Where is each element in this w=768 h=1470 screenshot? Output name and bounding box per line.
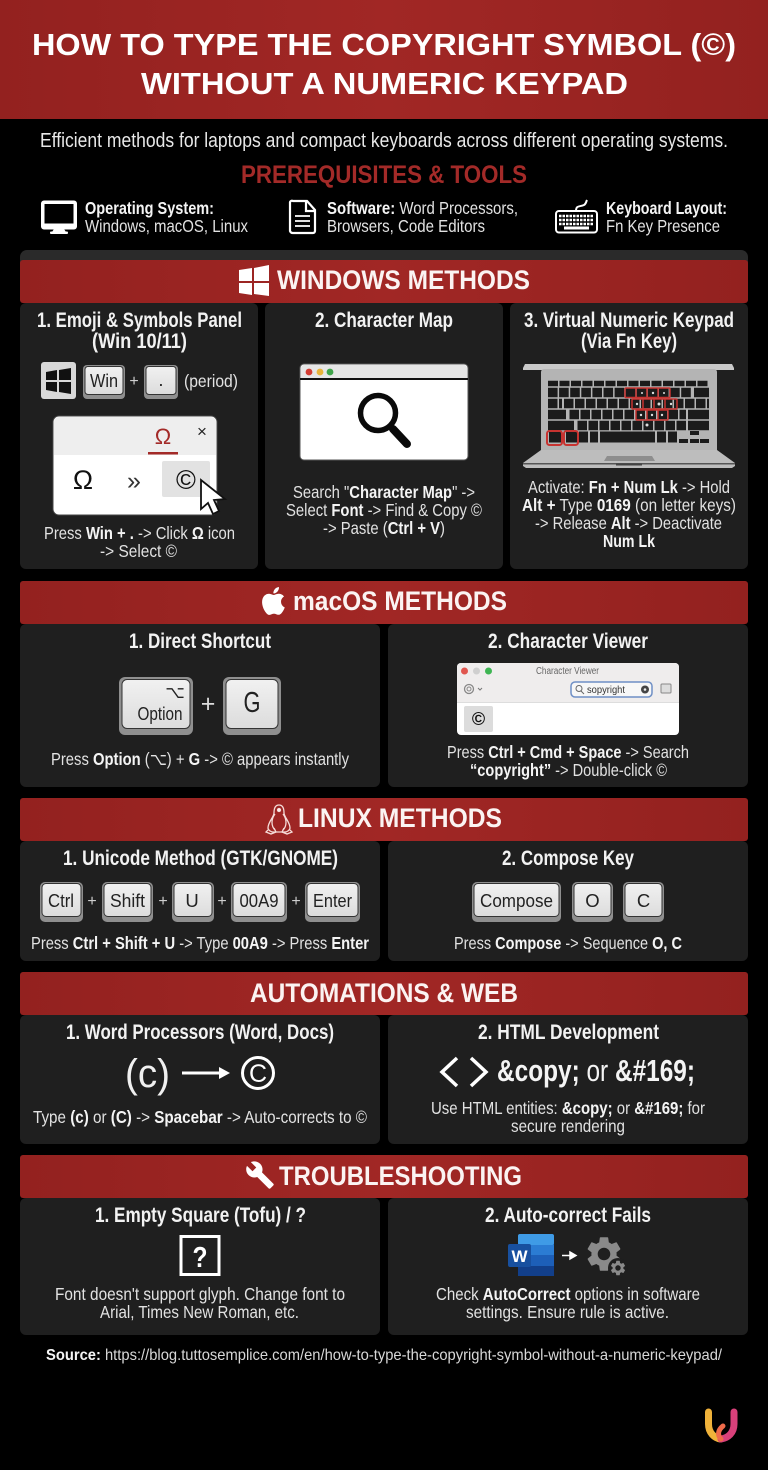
- title: HOW TO TYPE THE COPYRIGHT SYMBOL (©): [32, 28, 736, 62]
- arrow: [562, 1252, 576, 1259]
- card title: (Win 10/11): [92, 330, 187, 353]
- card title: [37, 309, 242, 353]
- icon: tofu square: ?: [192, 1242, 208, 1274]
- panel: windows methods: [20, 250, 748, 569]
- option plus g keys: +: [201, 690, 215, 718]
- icon: document: [290, 201, 315, 233]
- character viewer window: ©: [472, 709, 485, 729]
- shortcut keys: [41, 362, 238, 399]
- compose key sequence: Compose: [480, 890, 553, 911]
- automations header bar: [20, 972, 748, 1015]
- card: direct shortcut: [20, 624, 380, 787]
- windows header bar: [20, 260, 748, 303]
- compose key sequence: O: [585, 890, 600, 911]
- card: compose key: [388, 841, 748, 961]
- html entities illustration: &copy; or &#169;: [497, 1053, 695, 1088]
- card: unicode method: 1. Unicode Method (GTK/GNOME): [63, 847, 338, 870]
- card title: 1. Emoji & Symbols Panel: [37, 309, 242, 332]
- header banner: [0, 0, 768, 119]
- card text: Press Compose -> Sequence O, C: [454, 933, 682, 953]
- prerequisite: operating system: [41, 198, 248, 236]
- card text: -> Select ©: [100, 541, 177, 561]
- card text: Type (c) or (C) -> Spacebar -> Auto-corrects to ©: [33, 1107, 367, 1127]
- card: html development: [388, 1015, 748, 1144]
- autocorrect illustration: (c): [125, 1052, 170, 1096]
- icon: monitor: [41, 200, 77, 234]
- card: word processors: 1. Word Processors (Word, Docs): [66, 1021, 334, 1044]
- linux header bar: [20, 798, 748, 841]
- troubleshooting header bar: TROUBLESHOOTING: [279, 1161, 522, 1191]
- heading: prerequisites and tools: PREREQUISITES & TOOLS: [241, 161, 527, 189]
- emoji panel window: »: [127, 467, 141, 495]
- card: character viewer: 2. Character Viewer: [488, 630, 648, 653]
- card text: [436, 1284, 700, 1322]
- card: empty square: 1. Empty Square (Tofu) / ?: [95, 1204, 306, 1227]
- compose key sequence: C: [637, 890, 650, 911]
- card text: Press Ctrl + Cmd + Space -> Search: [447, 742, 689, 762]
- card text: Check AutoCorrect options in software: [436, 1284, 700, 1304]
- source line: Source: https://blog.tuttosemplice.com/en/how-to-type-the-copyright-symbol-without-a-numeric-keypad/: [46, 1347, 723, 1364]
- card: character viewer: [388, 624, 748, 787]
- panel: linux methods: [20, 798, 748, 961]
- card: auto-correct fails: [388, 1198, 748, 1335]
- icon: keyboard: [556, 200, 597, 232]
- logo: [708, 1412, 734, 1439]
- option plus g keys: ⌥: [165, 683, 185, 702]
- card: character map: [265, 303, 503, 569]
- card text: -> Paste (Ctrl + V): [323, 518, 445, 538]
- card title: [524, 309, 734, 353]
- option plus g keys: Option: [138, 703, 182, 724]
- prerequisite: keyboard layout: [556, 198, 727, 236]
- card text: [44, 523, 235, 561]
- troubleshooting header bar: [20, 1155, 748, 1198]
- unicode key sequence: +: [291, 893, 301, 910]
- unicode key sequence: +: [217, 893, 227, 910]
- title: WITHOUT A NUMERIC KEYPAD: [141, 67, 628, 101]
- card text: Search "Character Map" ->: [293, 482, 475, 502]
- icon: tofu square: [181, 1236, 219, 1274]
- prerequisite: software: Software: Word Processors,: [327, 198, 518, 218]
- icon: word logo: [508, 1234, 554, 1276]
- unicode key sequence: 00A9: [240, 890, 278, 911]
- icon: penguin: [266, 805, 292, 834]
- panel: automations and web: [20, 972, 748, 1144]
- card: direct shortcut: 1. Direct Shortcut: [129, 630, 271, 653]
- card text: [431, 1098, 705, 1136]
- icon: wrench: [246, 1161, 274, 1189]
- autocorrect illustration: C: [249, 1060, 267, 1088]
- compose key sequence: [472, 882, 664, 922]
- icon: angle brackets: [442, 1058, 486, 1086]
- card: virtual numeric keypad: [510, 303, 748, 569]
- card text: Num Lk: [603, 531, 655, 551]
- unicode key sequence: Shift: [110, 890, 145, 911]
- card: auto-correct fails: 2. Auto-correct Fails: [485, 1204, 651, 1227]
- prerequisite: operating system: Windows, macOS, Linux: [85, 216, 248, 236]
- card text: [522, 477, 736, 551]
- automations header bar: AUTOMATIONS & WEB: [250, 978, 518, 1008]
- card: empty square: [20, 1198, 380, 1335]
- prerequisite: operating system: Operating System:: [85, 198, 214, 218]
- unicode key sequence: Enter: [313, 890, 352, 911]
- option plus g keys: [119, 677, 281, 735]
- card text: Press Win + . -> Click Ω icon: [44, 523, 235, 543]
- panel: macos methods: [20, 581, 748, 787]
- card text: [55, 1284, 345, 1322]
- character viewer window: Character Viewer: [536, 666, 600, 677]
- unicode key sequence: +: [87, 893, 97, 910]
- icon: word logo: W: [511, 1247, 528, 1266]
- unicode key sequence: [40, 882, 360, 922]
- shortcut keys: Win: [90, 370, 118, 391]
- card: html development: 2. HTML Development: [478, 1021, 659, 1044]
- card text: settings. Ensure rule is active.: [466, 1302, 669, 1322]
- card text: Alt + Type 0169 (on letter keys): [522, 495, 736, 515]
- windows header bar: WINDOWS METHODS: [277, 265, 530, 295]
- card text: [447, 742, 689, 780]
- card: emoji and symbols panel: [20, 303, 258, 569]
- shortcut keys: (period): [184, 371, 238, 391]
- card: word processors: [20, 1015, 380, 1144]
- macos header bar: [20, 581, 748, 624]
- icon: settings gears: [588, 1237, 628, 1278]
- card: unicode method: [20, 841, 380, 961]
- card text: -> Release Alt -> Deactivate: [535, 513, 722, 533]
- title: [32, 28, 736, 101]
- character viewer window: sopyright: [587, 684, 625, 696]
- character map window: [300, 364, 468, 460]
- card text: Font doesn't support glyph. Change font to: [55, 1284, 345, 1304]
- character viewer window: [457, 663, 679, 735]
- icon: apple logo: [262, 587, 285, 615]
- card: compose key: 2. Compose Key: [502, 847, 634, 870]
- prerequisite: keyboard layout: Fn Key Presence: [606, 216, 720, 236]
- icon: magnifying glass: [360, 396, 407, 444]
- emoji panel window: ×: [197, 422, 207, 441]
- macos header bar: macOS METHODS: [293, 586, 507, 616]
- prerequisite: keyboard layout: Keyboard Layout:: [606, 198, 727, 218]
- card text: Use HTML entities: &copy; or &#169; for: [431, 1098, 705, 1118]
- card text: secure rendering: [511, 1116, 625, 1136]
- icon: windows logo: [239, 265, 269, 296]
- prerequisite: software: Browsers, Code Editors: [327, 216, 485, 236]
- card: character map: 2. Character Map: [315, 309, 453, 332]
- card title: (Via Fn Key): [581, 330, 677, 353]
- card text: Press Option (⌥) + G -> © appears instantly: [51, 749, 349, 769]
- shortcut keys: .: [158, 369, 164, 390]
- icon: mouse cursor: [201, 480, 225, 514]
- emoji panel window: [53, 416, 225, 515]
- unicode key sequence: Ctrl: [48, 890, 74, 911]
- emoji panel window: Ω: [73, 465, 93, 495]
- card text: “copyright” -> Double-click ©: [470, 760, 667, 780]
- emoji panel window: ©: [176, 465, 196, 495]
- card text: Activate: Fn + Num Lk -> Hold: [528, 477, 730, 497]
- linux header bar: LINUX METHODS: [298, 803, 502, 833]
- laptop illustration: [523, 364, 735, 468]
- autocorrect illustration: [125, 1052, 274, 1096]
- card text: Press Ctrl + Shift + U -> Type 00A9 -> Press Enter: [31, 933, 369, 953]
- prerequisite: software: [290, 198, 518, 236]
- panel: troubleshooting: [20, 1155, 748, 1335]
- unicode key sequence: +: [158, 893, 168, 910]
- shortcut keys: +: [129, 373, 139, 390]
- card text: Select Font -> Find & Copy ©: [286, 500, 482, 520]
- emoji panel window: Ω: [155, 424, 171, 449]
- option plus g keys: G: [244, 687, 260, 719]
- unicode key sequence: U: [185, 890, 199, 911]
- card text: [286, 482, 482, 538]
- card text: Arial, Times New Roman, etc.: [100, 1302, 299, 1322]
